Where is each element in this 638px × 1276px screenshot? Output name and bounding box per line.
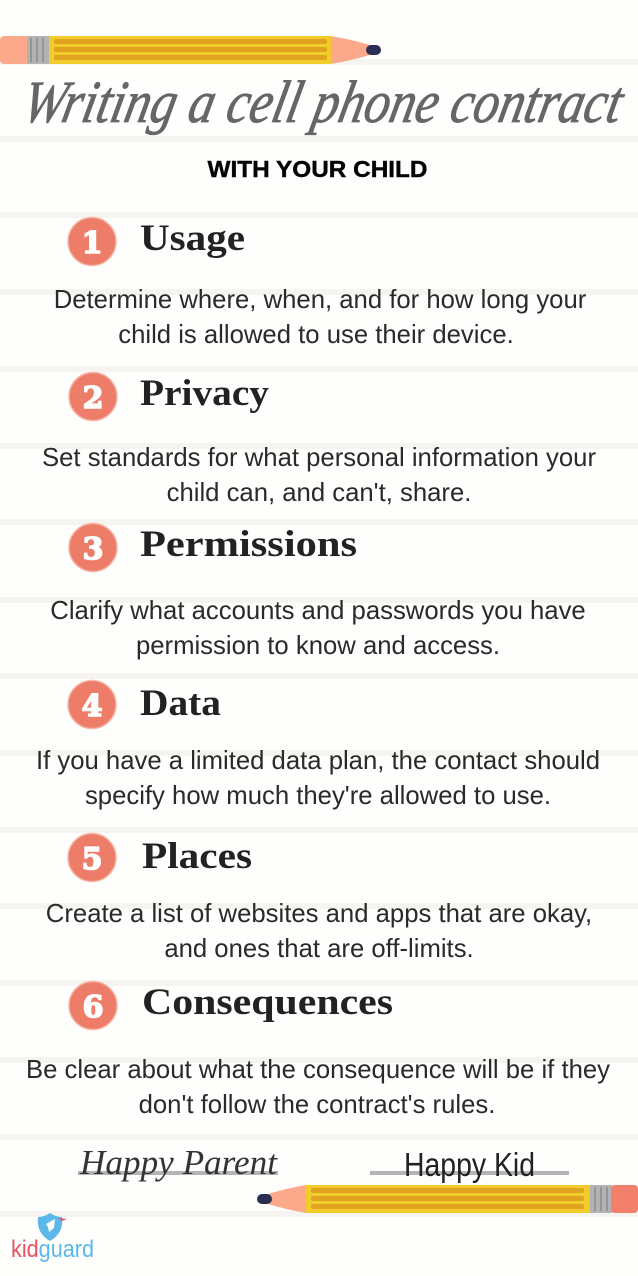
text: places: and ones that are off-limits. <box>164 935 474 963</box>
section 2: privacy <box>42 372 596 507</box>
text: data: If you have a limited data plan, the contact should <box>36 747 600 775</box>
text: privacy: child can, and can't, share. <box>167 479 471 507</box>
text: data: specify how much they're allowed to use. <box>85 782 551 810</box>
icon: number 4 badge <box>68 680 116 728</box>
icon: number 5 badge: 5 <box>82 842 102 877</box>
text: places: Create a list of websites and apps that are okay, <box>46 900 592 928</box>
text: consequences: don't follow the contract's rules. <box>139 1091 495 1119</box>
logo wordmark: kidguard <box>11 1236 94 1263</box>
text: places <box>46 900 592 963</box>
subtitle: WITH YOUR CHILD <box>208 156 428 182</box>
section 3: permissions <box>50 524 586 660</box>
text: permissions: Clarify what accounts and passwords you have <box>50 597 586 625</box>
icon: number 1 badge <box>68 218 116 266</box>
text: usage <box>54 286 587 349</box>
icon: bottom pencil <box>257 1185 638 1213</box>
heading: consequences: Consequences <box>142 982 393 1023</box>
text: permissions <box>50 597 586 660</box>
section 6: consequences <box>26 982 610 1119</box>
icon: number 5 badge <box>68 834 116 882</box>
heading: places: Places <box>142 836 252 877</box>
section 4: data <box>36 680 600 810</box>
text: privacy <box>42 444 596 507</box>
icon: shield <box>38 1213 67 1241</box>
icon: number 3 badge: 3 <box>83 532 103 567</box>
icon: number 2 badge <box>69 372 117 420</box>
text: usage: Determine where, when, and for how long your <box>54 286 587 314</box>
text: consequences: Be clear about what the consequence will be if they <box>26 1056 610 1084</box>
heading: usage: Usage <box>140 218 245 259</box>
text: privacy: Set standards for what personal information your <box>42 444 596 472</box>
logo: kidguard <box>11 1213 94 1263</box>
signature: happy kid: Happy Kid <box>404 1146 535 1183</box>
section 1: usage <box>54 218 587 349</box>
signature: happy parent: Happy Parent <box>79 1144 279 1182</box>
text: consequences <box>26 1056 610 1119</box>
icon: number 2 badge: 2 <box>83 381 103 416</box>
text: data <box>36 747 600 810</box>
icon: number 1 badge: 1 <box>82 226 102 261</box>
icon: number 3 badge <box>69 524 117 572</box>
heading: privacy: Privacy <box>140 373 270 414</box>
section 5: places <box>46 834 592 963</box>
icon: number 6 badge: 6 <box>83 990 103 1025</box>
icon: number 4 badge: 4 <box>82 689 102 724</box>
heading: data: Data <box>140 683 221 724</box>
icon: top pencil <box>0 36 381 64</box>
heading: permissions: Permissions <box>140 524 357 565</box>
text: permissions: permission to know and access. <box>136 632 500 660</box>
text: usage: child is allowed to use their device. <box>118 321 514 349</box>
icon: number 6 badge <box>69 982 117 1030</box>
